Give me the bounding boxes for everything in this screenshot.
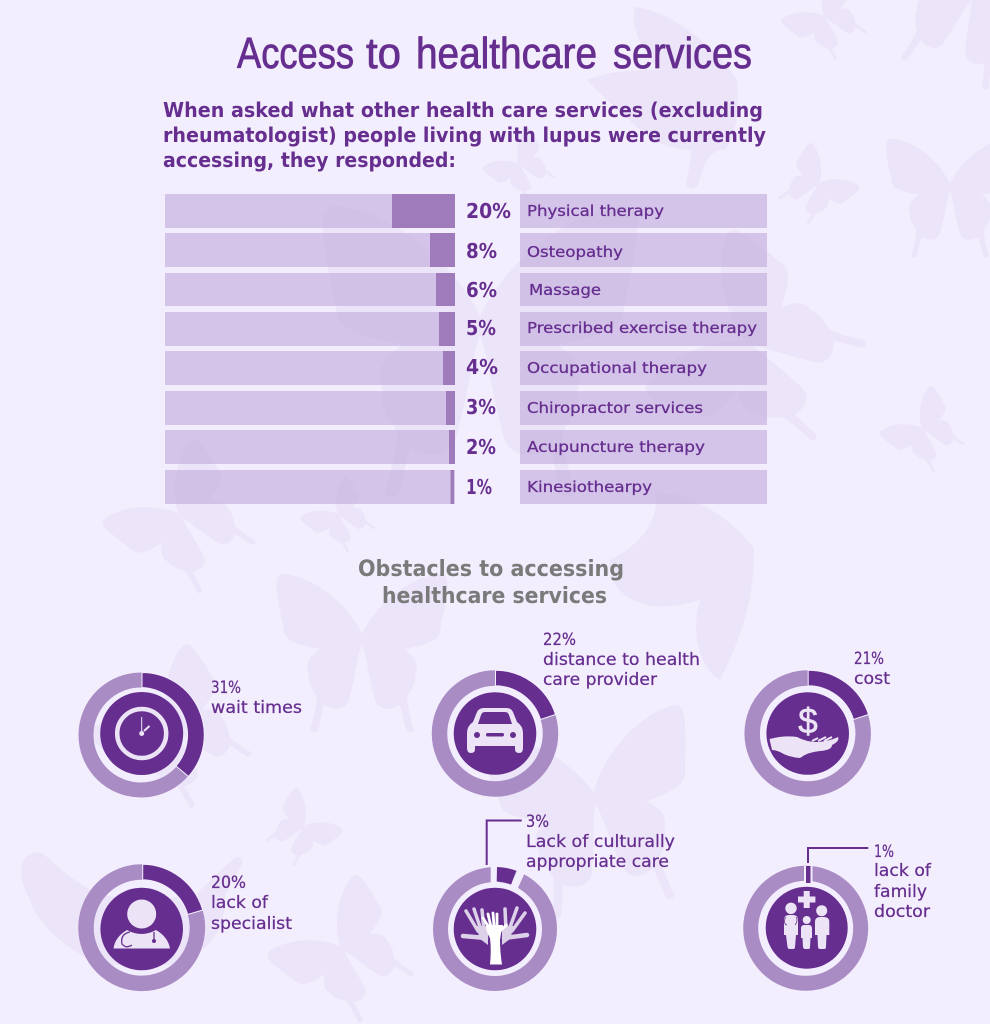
icon: clock [117, 709, 166, 758]
row: prescribed exercise therapy 5% [165, 312, 767, 346]
row: physical therapy 20%: Physical therapy [527, 202, 664, 220]
row: kinesiotherapy 1%: 1% [466, 475, 492, 499]
donut: culturally appropriate care 3% [440, 812, 675, 984]
leader line [487, 820, 522, 865]
icon: doctor [114, 900, 170, 948]
label: distance to health [543, 650, 700, 669]
icon: car [467, 708, 523, 753]
row: chiropractor services 3% [165, 391, 767, 425]
icon: raised hands [463, 908, 527, 964]
intro heading: accessing, they responded: [163, 148, 456, 172]
leader line [808, 848, 868, 863]
title: to [366, 29, 401, 78]
bar chart: health care services accessed [165, 194, 767, 504]
label [211, 678, 302, 717]
row: occupational therapy 4% [165, 351, 767, 385]
icon: doctor and family [784, 891, 829, 949]
donut: wait times 31% [86, 672, 302, 790]
donut: lack of specialist 20% [86, 864, 293, 983]
row: physical therapy 20%: 20% [466, 199, 511, 223]
title: services [613, 29, 752, 78]
row: occupational therapy 4%: Occupational therapy [527, 359, 707, 377]
intro heading: When asked what other health care services (excluding [163, 98, 763, 122]
row: acupuncture therapy 2% [165, 430, 767, 464]
row: occupational therapy 4%: 4% [466, 355, 498, 379]
label: care provider [543, 670, 657, 689]
row: osteopathy 8% [165, 233, 767, 267]
obstacles heading [358, 556, 624, 609]
row: acupuncture therapy 2%: 2% [466, 435, 496, 459]
obstacles heading: Obstacles to accessing [358, 556, 624, 582]
title [237, 29, 752, 78]
label [543, 630, 700, 689]
label [874, 842, 932, 921]
title: Access [237, 29, 354, 78]
row: massage 6%: Massage [529, 281, 601, 299]
label: 20% [211, 873, 246, 892]
label: 1% [874, 842, 894, 861]
label [211, 873, 293, 933]
label: 21% [854, 649, 884, 668]
label: 31% [211, 678, 241, 697]
donut: distance 22% [440, 630, 700, 789]
label: Lack of culturally [526, 832, 675, 851]
row: acupuncture therapy 2%: Acupuncture therapy [527, 438, 705, 456]
label: appropriate care [526, 852, 669, 871]
row: physical therapy 20% [165, 194, 767, 228]
label [854, 649, 891, 688]
label: family [874, 882, 927, 901]
label [526, 812, 675, 871]
title: healthcare [416, 29, 597, 78]
row: prescribed exercise therapy 5%: Prescribed exercise therapy [527, 319, 757, 337]
row: massage 6%: 6% [466, 278, 497, 302]
donut: lack of family doctor 1% [751, 842, 932, 983]
row: chiropractor services 3%: 3% [466, 395, 496, 419]
row: chiropractor services 3%: Chiropractor services [527, 399, 703, 417]
icon: hand with dollar: $ [798, 702, 818, 741]
label: doctor [874, 902, 930, 921]
label: lack of [874, 861, 932, 880]
label: lack of [211, 893, 269, 912]
row: massage 6% [165, 273, 767, 306]
label: 3% [526, 812, 549, 831]
donut: cost 21% [752, 649, 891, 789]
obstacles heading: healthcare services [382, 583, 607, 609]
label: wait times [211, 698, 302, 717]
row: kinesiotherapy 1% [165, 470, 767, 504]
intro heading [163, 98, 766, 172]
label: cost [854, 669, 891, 688]
intro heading: rheumatologist) people living with lupus were currently [163, 123, 766, 147]
row: osteopathy 8%: Osteopathy [527, 243, 623, 261]
row: osteopathy 8%: 8% [466, 239, 497, 263]
label: specialist [211, 914, 293, 933]
row: kinesiotherapy 1%: Kinesiothearpy [527, 478, 652, 496]
row: prescribed exercise therapy 5%: 5% [466, 316, 496, 340]
label: 22% [543, 630, 576, 649]
